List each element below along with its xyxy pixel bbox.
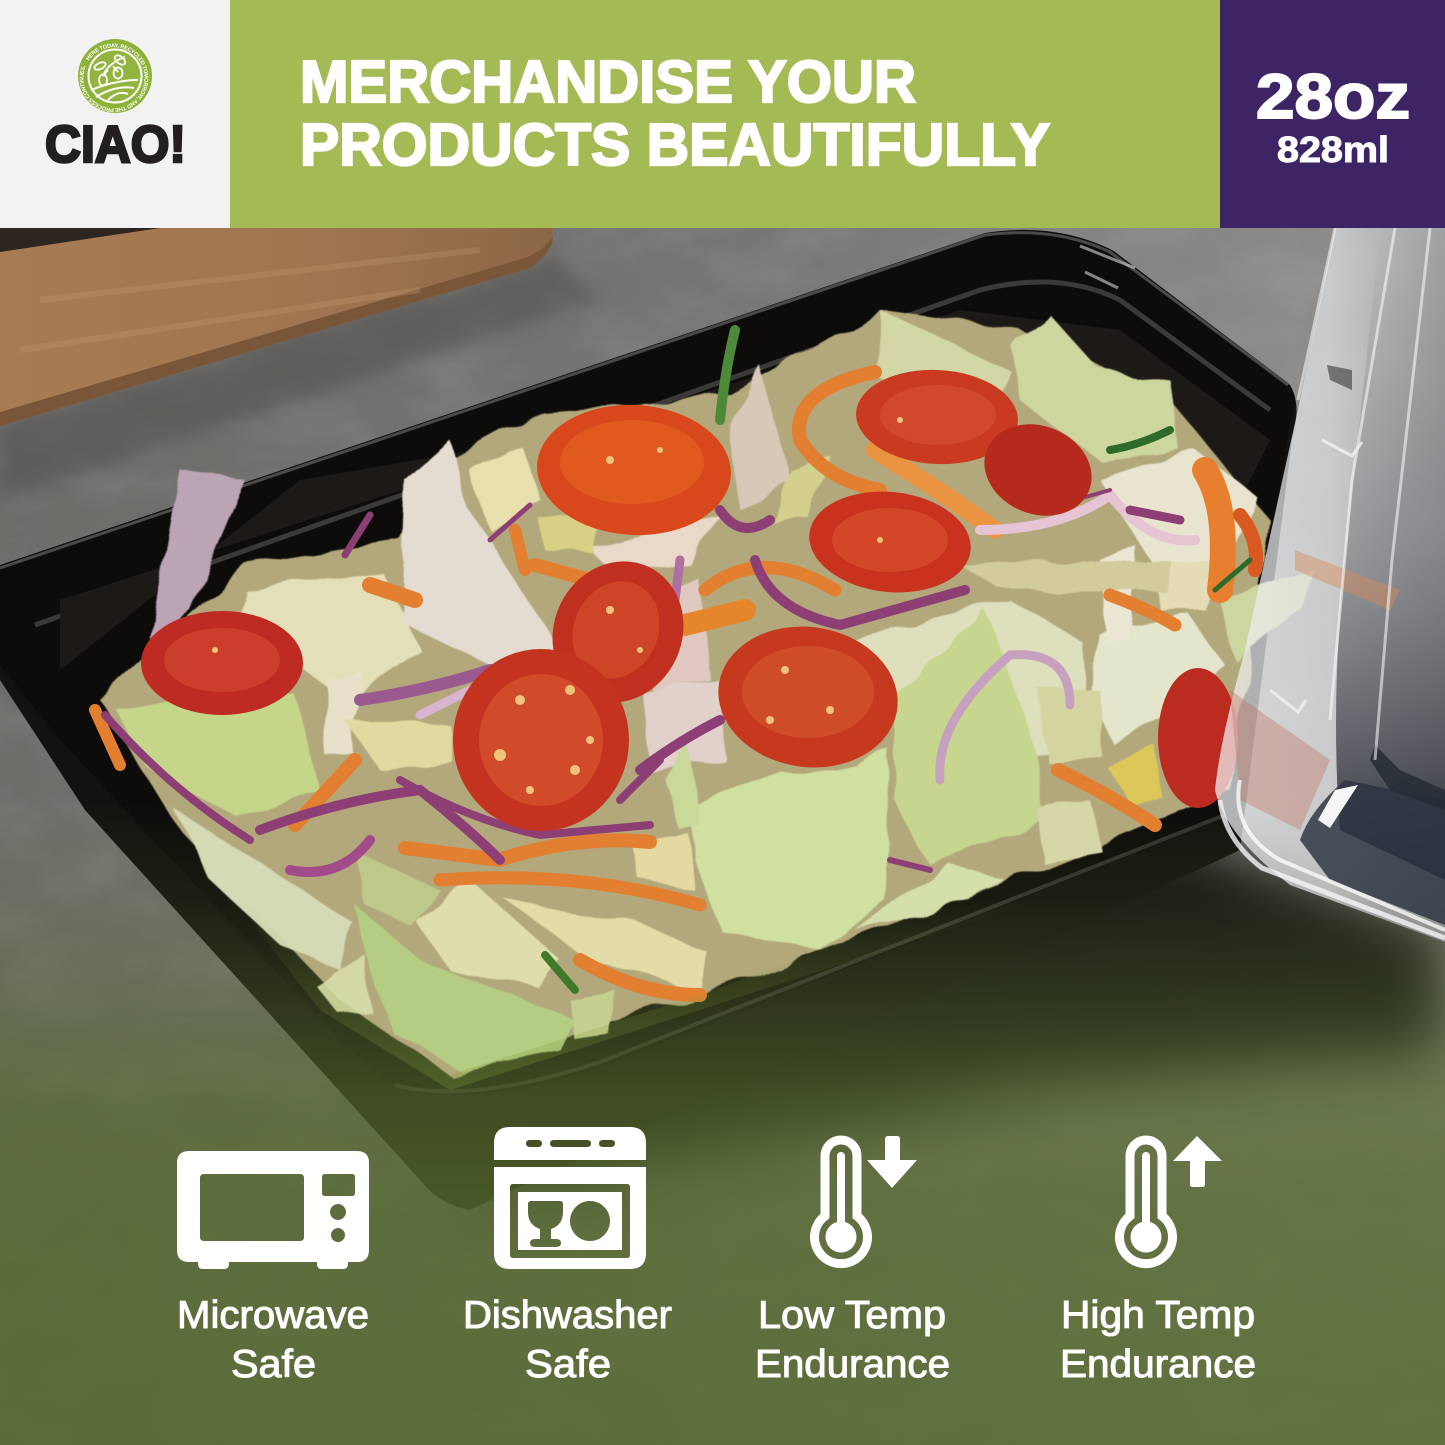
label: dishwasher safe bbox=[463, 1294, 672, 1386]
bottom green colour fade bbox=[0, 800, 1445, 1445]
icon: thermometer with up arrow bbox=[1120, 1136, 1222, 1264]
headline: MERCHANDISE YOUR bbox=[300, 49, 916, 115]
logo badge: HERE TODAY, RECYCLED TOMORROW, AND THE PROCESS CONTINUES. bbox=[80, 43, 148, 112]
salad bbox=[95, 310, 1315, 1090]
label: microwave safe bbox=[177, 1294, 369, 1386]
label: low temp endurance: Low Temp bbox=[758, 1294, 946, 1337]
cast shadow of tray and lid bbox=[510, 832, 1445, 1208]
icon: dishwasher bbox=[494, 1127, 646, 1269]
label: microwave safe: Safe bbox=[231, 1343, 316, 1386]
salad green tint bbox=[268, 941, 899, 1090]
headline: PRODUCTS BEAUTIFULLY bbox=[300, 112, 1050, 178]
label: dishwasher safe: Safe bbox=[525, 1343, 611, 1386]
icon: thermometer with down arrow bbox=[815, 1136, 917, 1264]
capacity in millilitres: 828ml bbox=[1277, 129, 1389, 170]
headline bbox=[300, 49, 1050, 178]
feature: microwave safe bbox=[177, 1151, 369, 1386]
clear plastic lid bbox=[1215, 228, 1445, 942]
label: dishwasher safe: Dishwasher bbox=[463, 1294, 672, 1337]
feature: high temperature endurance bbox=[1060, 1136, 1256, 1386]
salad base leaves bbox=[100, 310, 1315, 1075]
label: high temp endurance: Endurance bbox=[1060, 1343, 1256, 1386]
header: logo panel bbox=[0, 0, 230, 228]
header: capacity panel bbox=[1220, 0, 1445, 228]
black meal prep tray bbox=[0, 230, 1297, 1210]
feature: low temperature endurance bbox=[755, 1136, 950, 1386]
label: high temp endurance: High Temp bbox=[1061, 1294, 1255, 1337]
purple cabbage shreds bbox=[105, 330, 1250, 990]
cherry tomatoes bbox=[141, 366, 1238, 831]
carrot strips bbox=[95, 372, 1256, 995]
wooden cutting board bbox=[0, 228, 553, 426]
capacity value: 28oz bbox=[1256, 62, 1410, 132]
label: microwave safe: Microwave bbox=[177, 1294, 369, 1337]
label: low temp endurance: Endurance bbox=[755, 1343, 950, 1386]
label: high temp endurance bbox=[1060, 1294, 1256, 1386]
feature: dishwasher safe bbox=[463, 1127, 672, 1386]
icon: microwave bbox=[177, 1151, 369, 1269]
logo wordmark: CIAO! bbox=[45, 116, 186, 174]
label: low temp endurance bbox=[755, 1294, 950, 1386]
header: headline panel bbox=[230, 0, 1220, 228]
